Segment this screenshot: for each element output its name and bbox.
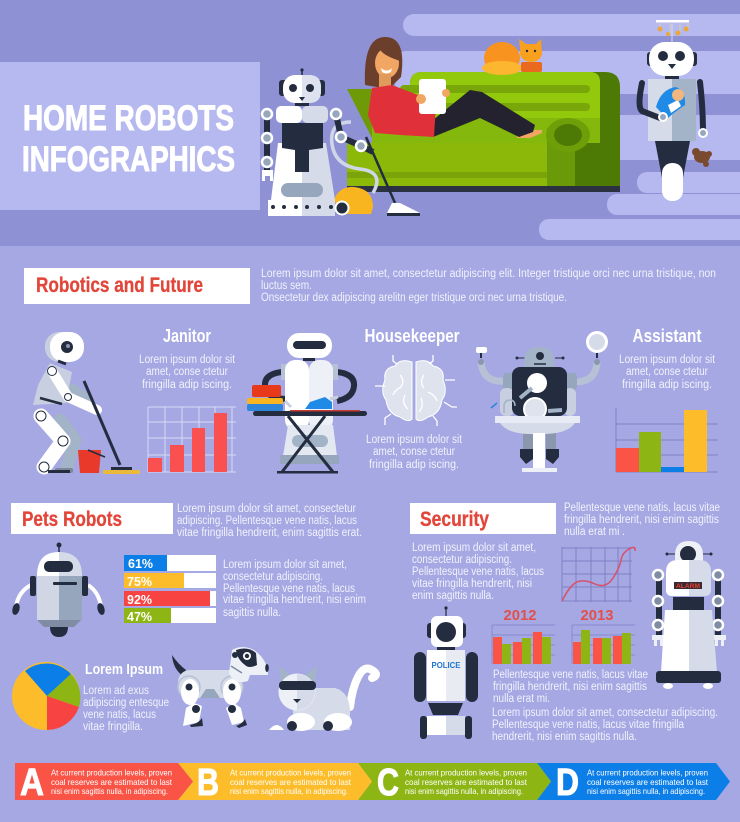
security left text xyxy=(412,542,544,602)
arrow C: At current production levels, proven xyxy=(405,768,527,778)
panel: pets robots xyxy=(11,503,362,539)
assistant text: Lorem ipsum dolor sit xyxy=(619,354,716,366)
lorem ipsum text: vene natis, lacus xyxy=(83,709,156,721)
progress bars xyxy=(124,555,216,624)
icon: police robot: POLICE xyxy=(432,660,461,670)
title panel xyxy=(0,62,260,210)
arrow A: coal reserves are estimated to last xyxy=(51,777,173,787)
arrow D: At current production levels, proven xyxy=(587,768,708,778)
security left text: consectetur adipiscing. xyxy=(412,554,512,566)
illustration: cat on sofa xyxy=(482,39,542,75)
bar chart: assistant xyxy=(616,408,718,472)
icon: police robot xyxy=(414,606,478,739)
janitor text: amet, conse ctetur xyxy=(146,366,228,378)
intro text: luctus sem. xyxy=(261,280,312,292)
arrow A xyxy=(15,762,193,804)
security middle text: fringilla hendrerit, nisi enim sagittis xyxy=(493,681,647,693)
icon: housekeeper robot xyxy=(247,333,367,474)
arrow B: At current production levels, proven xyxy=(230,768,351,778)
illustration: nanny robot xyxy=(640,20,712,201)
progress bars text: sagittis nulla. xyxy=(223,607,281,619)
security left text: enim sagittis nulla. xyxy=(412,590,494,602)
arrow D: D xyxy=(556,762,579,804)
icon: robot cat xyxy=(269,666,376,731)
security middle text xyxy=(493,669,648,705)
icon: assistant robot xyxy=(476,331,608,472)
header band xyxy=(0,0,740,246)
title: HOME ROBOTS xyxy=(23,99,234,138)
arrow B: nisi enim sagittis nulla, in adipiscing. xyxy=(230,786,348,796)
title: INFOGRAPHICS xyxy=(22,140,235,179)
heading: robotics and future: Robotics and Future xyxy=(36,274,203,297)
security middle text: nulla erat mi. xyxy=(493,693,550,705)
security left text: Pellentesque vene natis, lacus xyxy=(412,566,544,578)
assistant text: amet, conse ctetur xyxy=(626,366,708,378)
heading: security xyxy=(410,503,556,534)
housekeeper text: fringilla adip iscing. xyxy=(369,459,459,471)
arrow D: nisi enim sagittis nulla, in adipiscing. xyxy=(587,786,705,796)
pets intro text xyxy=(177,503,362,539)
progress bars text: vitae fringilla hendrerit, nisi enim xyxy=(223,594,366,606)
lorem ipsum text: vitae fringilla. xyxy=(83,721,143,733)
security middle text: Pellentesque vene natis, lacus vitae xyxy=(493,669,648,681)
progress bars text xyxy=(223,559,366,619)
security top text: nulla erat mi . xyxy=(564,526,625,538)
lorem ipsum text: adipiscing entesque xyxy=(83,697,169,709)
year labels xyxy=(504,607,614,624)
progress bars text: Pellentesque vene natis, lacus xyxy=(223,583,355,595)
security bottom text: Pellentesque vene natis, lacus vitae fringilla xyxy=(492,719,685,731)
year labels: 2012 xyxy=(504,607,536,624)
progress bars text: consectetur adipiscing. xyxy=(223,571,323,583)
arrow B: B xyxy=(197,762,219,804)
arrow D xyxy=(537,762,730,804)
icon: robot dog xyxy=(172,647,269,728)
pets intro text: adipiscing. Pellentesque vene natis, lacus xyxy=(177,515,357,527)
progress bars: 47% xyxy=(127,610,152,624)
panel: robotics and future xyxy=(24,268,716,304)
icon: brain xyxy=(375,355,457,426)
progress bars: 92% xyxy=(127,593,152,607)
security bottom text: hendrerit, nisi enim sagittis nulla. xyxy=(492,731,637,743)
lorem ipsum text xyxy=(83,685,169,733)
housekeeper text: amet, conse ctetur xyxy=(373,446,455,458)
bar chart: 2012 xyxy=(492,625,555,664)
panel: security xyxy=(410,502,720,538)
arrow A: A xyxy=(20,762,44,804)
line chart xyxy=(562,547,635,602)
arrow B: coal reserves are estimated to last xyxy=(230,777,352,787)
progress bars: 61% xyxy=(128,557,153,571)
arrow A: At current production levels, proven xyxy=(51,768,172,778)
bar chart: janitor xyxy=(148,407,236,472)
arrow D: coal reserves are estimated to last xyxy=(587,777,709,787)
security left text: vitae fringilla hendrerit, nisi xyxy=(412,578,532,590)
security top text: fringilla hendrerit, nisi enim sagittis xyxy=(564,514,719,526)
security bottom text xyxy=(492,707,718,743)
illustration: sofa xyxy=(347,72,620,192)
icon: alarm robot xyxy=(652,541,726,689)
intro text xyxy=(261,268,716,304)
year labels: 2013 xyxy=(580,607,614,624)
icon: pet robot xyxy=(11,542,106,637)
assistant heading: Assistant xyxy=(632,326,702,346)
heading: pets robots: Pets Robots xyxy=(22,508,122,531)
security top text xyxy=(564,502,720,538)
pets intro text: vitae fringilla hendrerit, enim sagittis erat. xyxy=(177,527,362,539)
security left text: Lorem ipsum dolor sit amet, xyxy=(412,542,536,554)
bar chart: 2013 xyxy=(572,625,635,664)
arrow B xyxy=(178,762,372,804)
assistant text xyxy=(619,354,716,391)
housekeeper heading: Housekeeper xyxy=(364,326,460,346)
arrow banner xyxy=(15,762,730,804)
housekeeper text xyxy=(366,434,463,471)
pie chart xyxy=(12,662,80,730)
arrow A: nisi enim sagittis nulla, in adipiscing. xyxy=(51,786,168,796)
heading: robotics and future xyxy=(24,268,250,304)
arrow C: C xyxy=(377,762,399,804)
arrow C xyxy=(358,762,551,804)
janitor heading: Janitor xyxy=(163,326,211,346)
janitor text: fringilla adip iscing. xyxy=(142,379,232,391)
progress bars: 75% xyxy=(127,575,152,589)
illustration: vacuum robot xyxy=(262,68,420,216)
assistant text: fringilla adip iscing. xyxy=(622,379,712,391)
icon: alarm robot: ALARM xyxy=(676,584,700,590)
pets intro text: Lorem ipsum dolor sit amet, consectetur xyxy=(177,503,356,515)
janitor text: Lorem ipsum dolor sit xyxy=(139,354,236,366)
housekeeper text: Lorem ipsum dolor sit xyxy=(366,434,463,446)
arrow C: coal reserves are estimated to last xyxy=(405,777,528,787)
lorem ipsum heading: Lorem Ipsum xyxy=(85,661,163,678)
lorem ipsum text: Lorem ad exus xyxy=(83,685,149,697)
heading: security: Security xyxy=(420,508,489,531)
janitor text xyxy=(139,354,236,391)
icon: janitor robot xyxy=(33,332,140,474)
heading: pets robots xyxy=(11,503,173,534)
intro text: Onsectetur dex adipiscing arelitn eger tristique orci nec urna tristique. xyxy=(261,292,567,304)
progress bars text: Lorem ipsum dolor sit amet, xyxy=(223,559,347,571)
illustration: woman reading xyxy=(365,37,542,138)
title xyxy=(22,99,235,179)
arrow C: nisi enim sagittis nulla, in adipiscing. xyxy=(405,786,523,796)
